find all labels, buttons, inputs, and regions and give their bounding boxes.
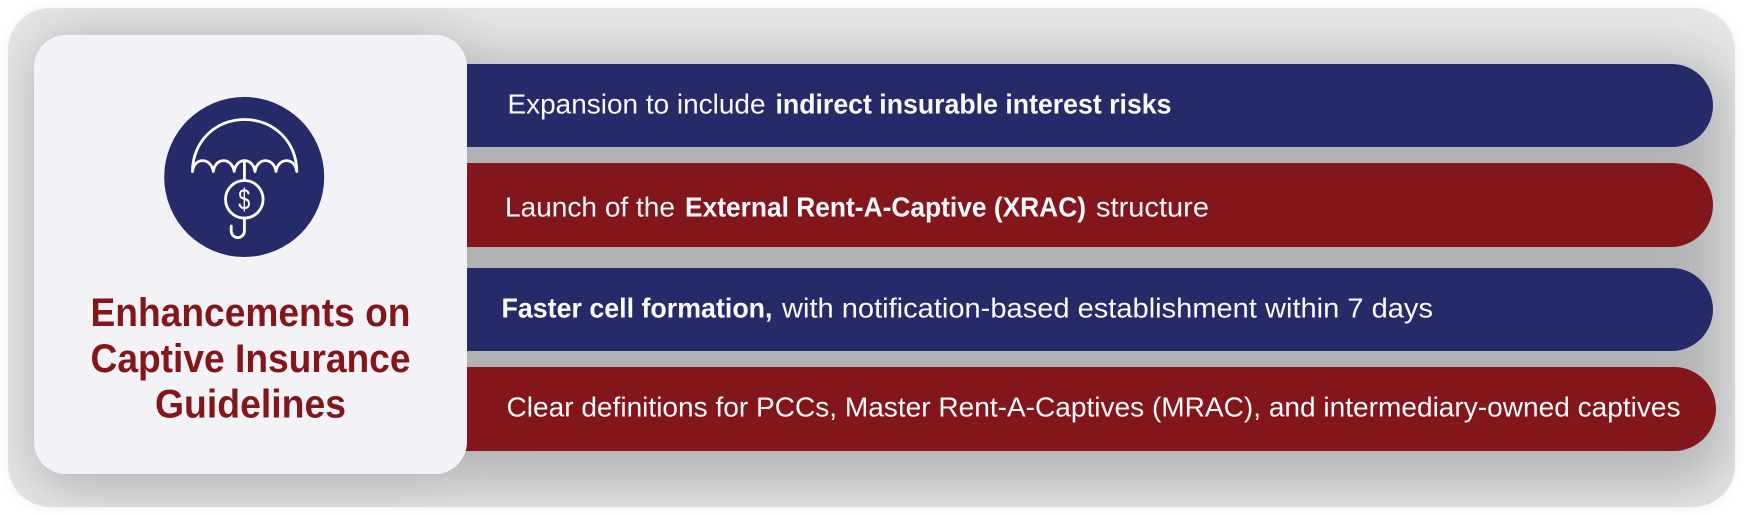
heading	[90, 291, 410, 426]
panel: title card	[34, 35, 467, 474]
bar 4: clear definitions	[460, 367, 1716, 451]
bar 2: External Rent-A-Captive structure: Launch of the	[505, 192, 675, 223]
icon: umbrella with dollar coin	[164, 97, 324, 257]
bar 2: External Rent-A-Captive structure: structure	[1096, 192, 1209, 223]
bar 3: faster cell formation	[460, 268, 1713, 351]
icon: umbrella with dollar coin: $	[238, 182, 251, 216]
heading: Guidelines	[155, 382, 346, 426]
bar 1: indirect insurable interest risks: Expansion to include	[508, 88, 766, 120]
bar 2: External Rent-A-Captive structure: External Rent-A-Captive (XRAC)	[685, 192, 1086, 223]
bar 3: faster cell formation: Faster cell formation,	[502, 293, 772, 324]
bar 1: indirect insurable interest risks: indirect insurable interest risks	[776, 88, 1172, 120]
bar 2: External Rent-A-Captive structure	[460, 163, 1713, 247]
heading: Enhancements on	[90, 291, 410, 335]
bar 3: faster cell formation: with notification-based establishment within 7 days	[781, 293, 1433, 324]
bar 1: indirect insurable interest risks	[460, 64, 1713, 147]
bar 4: clear definitions: Clear definitions for PCCs, Master Rent-A-Captives (MRAC), and intermediary-owned captives	[506, 392, 1680, 423]
heading: Captive Insurance	[90, 337, 410, 381]
